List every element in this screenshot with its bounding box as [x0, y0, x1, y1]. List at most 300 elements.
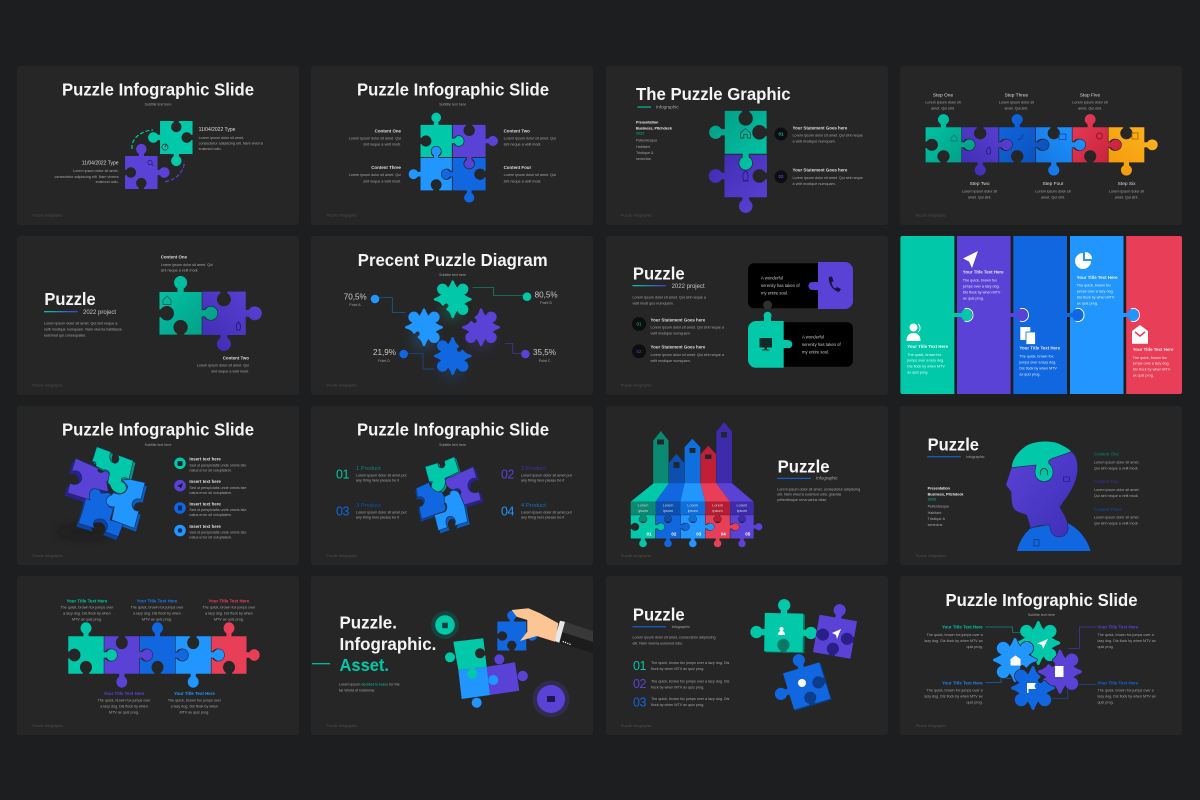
text: step five: Lorem ipsum dolor sit — [1072, 101, 1108, 105]
text: item 1: Sed ut perspiciatis unde omnis iste — [189, 464, 246, 468]
text: statement 2: Your Statement Goes here — [792, 168, 847, 173]
item 03: The quick, brown fox jumps over a lazy dog. Dis — [651, 697, 729, 701]
icon: home — [163, 296, 171, 304]
item 04: 04 — [501, 504, 514, 518]
footer: Puzzle Infographic — [916, 554, 946, 558]
icon: calculator — [1055, 666, 1064, 677]
column: light blue: The quick, brown fox — [1077, 284, 1111, 288]
icon: phone — [829, 276, 841, 292]
icon: envelope — [1010, 656, 1020, 666]
puzzle piece: purple — [1034, 646, 1091, 702]
text: side list: Habitant — [928, 511, 941, 515]
numbers: 05 — [745, 532, 751, 536]
text: left block: Lorem ipsum dolor sit amet, — [73, 169, 119, 173]
stat: 35,5%: Point C — [539, 359, 551, 363]
text: purple: lazy dog. Dis flock by when MTV ax — [1098, 639, 1156, 643]
text: description: elit. Nam viverra euismod odio. — [632, 641, 683, 645]
callout: black top — [748, 263, 819, 310]
item 02: flock by when MTV ax quiz prog. — [651, 685, 704, 689]
text: item 1: Insert text here — [189, 456, 221, 462]
subtitle: Subtitle text here — [439, 273, 466, 277]
puzzle grid — [408, 112, 498, 203]
subtitle: Infographic — [672, 625, 690, 629]
text: item 2: Sed ut perspiciatis unde omnis iste — [189, 486, 246, 490]
text: purple: The quick, brown fox jumps over a — [1098, 633, 1155, 637]
text: left block: 11/04/2022 Type — [82, 160, 119, 166]
text: statement 1: velit modique numquam. — [650, 331, 691, 335]
numbers: 03 — [696, 532, 702, 536]
column: red: jumps over a lazy dog. — [1132, 362, 1170, 366]
column: light blue: ax quiz prog. — [1077, 302, 1098, 306]
puzzle: teal piece — [445, 638, 487, 679]
text boxes: ipsum — [688, 509, 698, 513]
footer: Puzzle Infographic — [621, 384, 651, 388]
text: side list: Tristique & — [636, 151, 654, 155]
text: description: euismod qui consequatur. — [44, 333, 86, 337]
text: content two: Content Two — [504, 128, 530, 133]
text: content one: sint neque a velit modi. — [363, 143, 401, 147]
column: red — [1126, 236, 1182, 394]
panel: slide 11 arrows — [606, 406, 888, 565]
stat: 80,5% — [535, 290, 558, 305]
puzzle piece: light blue — [984, 629, 1041, 686]
text: step six: Step Six — [1118, 182, 1136, 187]
panel: slide 7 callout boxes — [606, 236, 888, 395]
footer: Puzzle Infographic — [326, 214, 357, 218]
text: teal: The quick, brown fox jumps over a — [927, 633, 984, 637]
column: red: Your Title Text Here — [1133, 347, 1173, 352]
column: teal: Dis flock by when MTV — [907, 365, 945, 369]
panel: slide 10 products — [311, 406, 593, 565]
stat: 35,5%: 35,5% — [533, 347, 557, 357]
text: description: velit modi quo numquam. — [632, 302, 674, 306]
text: blue: Your Title Text Here — [942, 681, 983, 686]
footer: Puzzle Infographic — [621, 724, 651, 728]
stat: 21,9%: 21,9% — [373, 347, 397, 357]
footer: Puzzle Infographic — [621, 554, 651, 558]
badge 02 — [774, 170, 788, 183]
vertical arrows — [653, 422, 732, 484]
icon: monitor — [1064, 477, 1070, 482]
puzzle piece: light blue — [402, 301, 450, 349]
column: dark blue: The quick, brown fox — [1019, 355, 1054, 359]
icon: purple image — [532, 680, 570, 718]
text: description: Lorem ipsum dolor sit amet. Qui sint neque a — [44, 322, 117, 326]
text: item 3: natus error sit voluptatem. — [189, 513, 232, 517]
panel: slide 9 3d puzzle list — [17, 406, 299, 565]
column: dark blue — [1013, 236, 1067, 394]
text: left block: consectetur adipiscing elit. Nam viverra — [54, 175, 120, 179]
icon: users — [906, 324, 920, 341]
puzzle piece: purple — [459, 305, 507, 354]
text boxes: ipsum — [713, 509, 723, 513]
footer: Puzzle Infographic — [326, 554, 357, 558]
text: light blue title: MTV ax quiz prog. — [179, 710, 209, 714]
text: content three: Qui sint neque a velit modi. — [1094, 522, 1138, 526]
numbers: 04 — [721, 532, 726, 536]
item 02: The quick, brown fox jumps over a lazy dog. Dis — [651, 679, 729, 683]
panel: slide 14 hand — [311, 576, 593, 735]
text: content one: Lorem ipsum dolor sit amet. — [1094, 460, 1140, 464]
title: Puzzle — [633, 605, 685, 625]
text: purple: quiz prog. — [1098, 645, 1114, 649]
column: purple: The quick, brown fox — [963, 278, 997, 282]
text: callout top: A wonderful — [761, 276, 783, 280]
subtitle: Infographic — [816, 476, 839, 480]
puzzle piece: purple — [813, 601, 859, 659]
panel: slide 8 color columns — [900, 236, 1182, 394]
text: side list: Pellentesque — [636, 139, 657, 143]
accent line — [777, 478, 811, 479]
item 02 — [633, 677, 729, 691]
item 01: flock by when MTV ax quiz prog. — [651, 667, 704, 671]
text: description: far World of Grammar. — [339, 689, 375, 693]
panel: slide 4 six steps — [900, 66, 1182, 225]
column: red: Dis flock by when MTV — [1133, 368, 1171, 372]
text: red title: MTV ax quiz prog. — [214, 618, 244, 622]
puzzle piece: dark blue — [765, 649, 832, 714]
puzzle piece: teal — [148, 121, 193, 166]
icon: home — [740, 128, 750, 138]
text: side list: Presentation — [636, 121, 659, 125]
text: step one: amet. Qui sint. — [931, 107, 955, 111]
text: content three: Content Three — [1094, 507, 1122, 512]
text: content four: Content Four — [504, 165, 531, 170]
title: Puzzle Infographic Slide — [357, 80, 549, 100]
accent line — [632, 626, 666, 627]
text: blue title: Your Title Text Here — [137, 598, 177, 604]
headline: Infographic. — [340, 634, 436, 654]
puzzle piece: purple — [709, 155, 767, 213]
title: Puzzle — [928, 435, 979, 455]
footer: Puzzle Infographic — [32, 214, 63, 218]
puzzle row — [68, 622, 260, 688]
text: left block: euismod odio. — [96, 180, 119, 184]
badge 01 — [632, 317, 646, 331]
text: side list: Presentation — [928, 486, 951, 490]
text: step two: Lorem ipsum dolor sit — [962, 190, 997, 194]
text: teal: lazy dog. Dis flock by when MTV ax — [924, 639, 983, 643]
puzzle piece: purple — [125, 144, 170, 189]
text: right block: consectetur adipiscing elit. Nam viverra — [199, 142, 264, 146]
puzzle piece: teal — [159, 276, 218, 335]
icon: rocket — [236, 322, 241, 330]
text: content one: Content One — [375, 128, 401, 133]
subtitle: 2022 project — [672, 284, 705, 290]
item 03: 03 — [633, 695, 646, 709]
text: teal title: MTV ax quiz prog. — [72, 618, 102, 622]
item 03: flock by when MTV ax quiz prog. — [651, 703, 704, 707]
column: purple: ax quiz prog. — [963, 296, 984, 300]
title: Puzzle Infographic Slide — [62, 80, 254, 100]
text: content one: sint neque a velit modi. — [161, 269, 198, 273]
footer: Puzzle Infographic — [32, 554, 63, 558]
text: callout top: serenity has taken of — [761, 283, 800, 288]
text: statement 2: Your Statement Goes here — [650, 345, 705, 350]
badge 02: 02 — [779, 174, 784, 179]
text: purple title: Your Title Text Here — [104, 691, 144, 696]
dots — [563, 641, 571, 645]
3d puzzle — [65, 447, 147, 540]
text: side list: senectus — [928, 523, 943, 527]
accent line — [312, 663, 330, 664]
item 04: any thing here please be it — [521, 516, 564, 520]
numbers: 02 — [671, 532, 677, 536]
text boxes: Lorem — [687, 504, 698, 508]
item 03 — [336, 503, 407, 520]
footer: Puzzle Infographic — [326, 724, 357, 728]
text: teal title: a lazy dog. Dis flock by when — [63, 612, 111, 616]
text boxes: Lorem — [638, 504, 648, 508]
text: blue title: The quick, brown fox jumps over — [130, 606, 184, 610]
arrow icons — [657, 432, 727, 468]
icon: headphones — [1040, 468, 1048, 475]
text: description: Lorem ipsum dolor sit amet. Qui sint neque a — [632, 296, 706, 300]
text: description: Lorem ipsum dolor sit amet, consectetur adipiscing — [632, 636, 716, 640]
column: red: ax quiz prog. — [1133, 373, 1154, 377]
item 03 — [633, 695, 729, 709]
text: step four: Lorem ipsum dolor sit — [1035, 190, 1071, 194]
column: dark blue: ax quiz prog. — [1019, 372, 1041, 376]
puzzle: purple piece — [487, 654, 528, 695]
text: dark blue: quiz prog. — [1098, 701, 1114, 705]
title: Puzzle Infographic Slide — [62, 420, 254, 440]
item 01 — [336, 466, 407, 482]
stat: 70,5% — [344, 292, 367, 307]
panel: slide 2 four pieces — [311, 66, 593, 225]
column: light blue: jumps over a lazy dog. — [1076, 290, 1114, 294]
text boxes: ipsum — [737, 509, 747, 513]
subtitle: Subtitle text here — [145, 443, 171, 447]
puzzle piece: teal — [709, 111, 767, 170]
text: teal title: Your Title Text Here — [67, 598, 107, 604]
column: red: The quick, brown fox — [1133, 356, 1167, 360]
text: content one: Lorem ipsum dolor sit amet. Qui — [161, 263, 213, 267]
text: step four: Step Four — [1042, 182, 1064, 187]
column: dark blue: Dis flock by when MTV — [1019, 366, 1057, 370]
text: content three: sint neque a velit modi. — [363, 179, 401, 183]
text boxes — [631, 502, 754, 522]
title: The Puzzle Graphic — [636, 84, 791, 104]
item 01: 01 — [336, 467, 349, 481]
callout: teal piece — [748, 312, 792, 368]
puzzle piece: dark blue — [1002, 662, 1059, 719]
text: red title: Your Title Text Here — [209, 598, 249, 604]
text: content one: Content One — [1094, 452, 1119, 456]
icon: search — [148, 160, 154, 166]
text: callout bottom: my entire soul. — [802, 350, 829, 355]
text: item 4: Insert text here — [189, 524, 221, 529]
item 02: Lorem ipsum dolor sit amet put — [521, 474, 572, 478]
title: Puzzle Infographic Slide — [946, 590, 1138, 610]
text: item 1: natus error sit voluptatem. — [189, 468, 232, 472]
text: side list: 2023 — [928, 498, 936, 502]
callout: black bottom — [780, 322, 853, 367]
text boxes: Lorem — [737, 504, 747, 508]
item 01: 1 Product — [356, 466, 381, 472]
text: purple title: MTV ax quiz prog. — [109, 710, 139, 714]
stat: 70,5%: 70,5% — [344, 292, 367, 302]
item 04 — [501, 503, 572, 520]
slanted bands — [631, 483, 754, 502]
item 03: Lorem ipsum dolor sit amet put — [356, 510, 407, 514]
shadow — [57, 526, 113, 538]
text: purple: Your Title Text Here — [1098, 625, 1138, 630]
text: side list: Business, Pitchdeck — [928, 492, 964, 496]
accent line — [638, 106, 651, 108]
text: side list: 2022 — [636, 132, 644, 136]
text: blue: quiz prog. — [966, 701, 983, 705]
text: content one: Lorem ipsum dolor sit amet. Qui — [349, 137, 401, 141]
text: description: Lorem ipsum dolor sit amet, consectetur adipiscing — [777, 487, 860, 491]
text: statement 2: a velit modique numquam. — [792, 182, 836, 186]
text: light blue title: a lazy dog. Dis flock by when — [171, 704, 218, 708]
column: dark blue: jumps over a lazy dog. — [1018, 361, 1056, 365]
text: teal: Your Title Text Here — [942, 625, 983, 630]
text: statement 2: Lorem ipsum dolor sit amet. Qui sint neque — [792, 176, 863, 180]
item 02: any thing here please be it — [521, 478, 564, 482]
text: callout top: my entire soul. — [761, 290, 788, 296]
text: item 4: Sed ut perspiciatis unde omnis iste — [189, 530, 246, 534]
3d puzzle — [415, 457, 483, 533]
puzzle row — [925, 114, 1158, 176]
title: Puzzle — [778, 457, 830, 477]
stat: 21,9%: Point D — [378, 359, 390, 363]
title: Puzzle Infographic Slide — [357, 420, 549, 440]
text: statement 1: Lorem ipsum dolor sit amet. Qui sint neque a — [650, 325, 725, 329]
text: light blue title: The quick, brown fox jumps over — [168, 698, 222, 702]
icon: flag — [1027, 683, 1036, 693]
panel: slide 1 two pieces — [17, 66, 299, 225]
text: content one: Content One — [161, 254, 187, 259]
column: teal: jumps over a lazy dog. — [906, 359, 944, 363]
puzzle piece: dark blue — [497, 611, 537, 650]
panel: slide 3 puzzle graphic — [606, 66, 888, 225]
glow — [410, 298, 495, 382]
text boxes: Lorem — [712, 504, 723, 508]
subtitle: Infographic — [966, 455, 985, 459]
dots — [371, 292, 531, 358]
text: blue: lazy dog. Dis flock by when MTV ax — [924, 695, 983, 699]
item 04: Lorem ipsum dolor sit amet put — [521, 510, 572, 514]
icon: paper plane — [963, 251, 978, 268]
text: callout bottom: A wonderful — [802, 335, 824, 340]
text: right block: euismod odio. — [199, 147, 222, 151]
text boxes: ipsum — [663, 509, 673, 513]
column: purple: Your Title Text Here — [963, 270, 1004, 275]
text: side list: Habitant — [636, 145, 650, 149]
subtitle: Subtitle text here — [439, 443, 466, 447]
text: content two: Lorem ipsum dolor sit amet. Qui — [197, 364, 249, 368]
icon: copy — [1020, 327, 1036, 344]
panel: slide 16 diamond puzzle — [900, 576, 1182, 735]
item 02: 2 Product — [521, 466, 546, 472]
head: shoulders — [1017, 522, 1091, 551]
text: side list: Pellentesque — [928, 505, 949, 509]
text: side list: senectus — [636, 157, 651, 161]
column: dark blue: Your Title Text Here — [1019, 346, 1060, 351]
subtitle: Subtitle text here — [1028, 613, 1055, 617]
item 01: any thing here please be it — [356, 478, 399, 482]
badges — [174, 458, 186, 536]
text: description: velit modique numquam. Nam viverra habitasse — [44, 327, 122, 331]
column: light blue: Dis flock by when MTV — [1077, 296, 1115, 300]
footer: Puzzle Infographic — [916, 724, 946, 728]
text: description: pellentesque urna varius vitae. — [777, 498, 827, 502]
text: content three: Content Three — [371, 165, 401, 170]
stat: 80,5%: 80,5% — [535, 290, 558, 300]
stat: 70,5%: Point A — [349, 303, 361, 307]
subtitle: Subtitle text here — [439, 102, 466, 106]
callout: purple tab — [808, 262, 853, 309]
connectors — [954, 308, 1139, 322]
item 01 — [633, 659, 729, 673]
panel: slide 13 titles row — [17, 576, 299, 735]
column: teal: ax quiz prog. — [907, 371, 928, 375]
accent line — [927, 456, 961, 457]
item 02: 02 — [633, 677, 646, 691]
column: purple: jumps over a lazy dog. — [962, 284, 1000, 288]
icon: tablet — [1034, 540, 1039, 546]
title: Puzzle — [633, 263, 685, 283]
text: step six: Lorem ipsum dolor sit — [1109, 190, 1144, 194]
stat: 21,9% — [373, 347, 397, 363]
text: statement 1: Lorem ipsum dolor sit amet. Qui sint neque — [792, 134, 863, 138]
footer: Puzzle Infographic — [916, 214, 946, 218]
text: step five: Step Five — [1080, 94, 1100, 99]
text: content two: Qui sint neque a velit modi. — [1094, 494, 1138, 498]
icon: plane — [1037, 639, 1048, 649]
head: profile — [1006, 452, 1078, 537]
item 04: 4 Product — [521, 503, 546, 509]
column: teal: The quick, brown fox — [907, 353, 941, 357]
text: item 2: natus error sit voluptatem. — [189, 491, 232, 495]
badge 01: 01 — [779, 132, 784, 136]
text: description: Lorem ipsum decided to leave for the — [339, 682, 400, 686]
footer: Puzzle Infographic — [32, 724, 63, 728]
puzzle piece: dark blue — [426, 334, 475, 382]
text: step one: Step One — [933, 94, 953, 99]
column: teal: Your Title Text Here — [907, 344, 948, 349]
text: step three: Lorem ipsum dolor sit — [999, 101, 1034, 105]
connectors — [985, 627, 1097, 698]
text: item 2: Insert text here — [189, 479, 221, 484]
text: side list: Business, Pitchdeck — [636, 126, 673, 130]
headline: Asset. — [340, 655, 389, 675]
text: item 3: Insert text here — [189, 502, 221, 506]
subtitle: Subtitle text here — [145, 102, 171, 106]
text: teal: quiz prog. — [966, 645, 983, 649]
text: content two: Lorem ipsum dolor sit amet. Qui — [504, 137, 556, 141]
head: teal cap — [1011, 441, 1072, 482]
item 03: any thing here please be it — [356, 516, 399, 520]
sleeve — [559, 622, 593, 653]
text: callout bottom: serenity has taken of — [802, 342, 841, 347]
text: content one: Qui sint neque a velit modi. — [1094, 466, 1138, 470]
column: light blue — [1070, 236, 1124, 394]
badge 01: 01 — [637, 322, 642, 326]
text: red title: The quick, brown fox jumps over — [202, 606, 256, 610]
subtitle: 2022 project — [83, 310, 116, 316]
icon: monitor — [760, 338, 772, 350]
stat: 35,5% — [533, 347, 557, 363]
text: content two: sint neque a velit modi. — [211, 369, 249, 373]
item 01: The quick, brown fox jumps over a lazy dog. Dis — [651, 661, 729, 665]
puzzle row — [631, 515, 763, 547]
text: content four: Lorem ipsum dolor sit amet. Qui — [504, 173, 556, 177]
panel: slide 5 two large pieces — [17, 236, 299, 395]
column: light blue: Your Title Text Here — [1077, 275, 1118, 280]
